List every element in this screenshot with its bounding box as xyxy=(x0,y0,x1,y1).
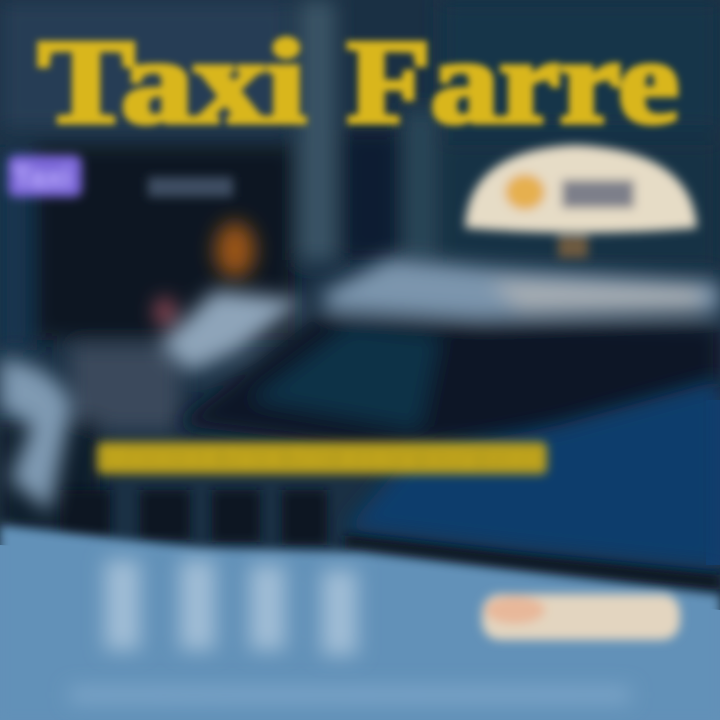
taxi roof sign xyxy=(465,145,697,258)
footer text: Fares vary by distance, time and traffic conditions xyxy=(70,687,630,704)
call to action badge xyxy=(482,594,680,640)
car: dark grille and lower trim xyxy=(60,490,720,590)
car: blue body xyxy=(345,380,720,570)
title: Taxi xyxy=(38,15,306,148)
badge: purple label xyxy=(8,155,82,197)
fare digit columns xyxy=(105,560,357,655)
lower panel xyxy=(0,525,720,720)
title xyxy=(38,15,679,148)
car: windshield and roof xyxy=(156,258,720,445)
subtitle bar: Metered fare for every city ride xyxy=(108,445,538,470)
wing mirror xyxy=(0,358,72,512)
sign text: street xyxy=(148,177,233,197)
orange window glow xyxy=(215,222,255,278)
badge: purple label: Taxi xyxy=(13,161,71,194)
title: Farre xyxy=(347,15,679,148)
